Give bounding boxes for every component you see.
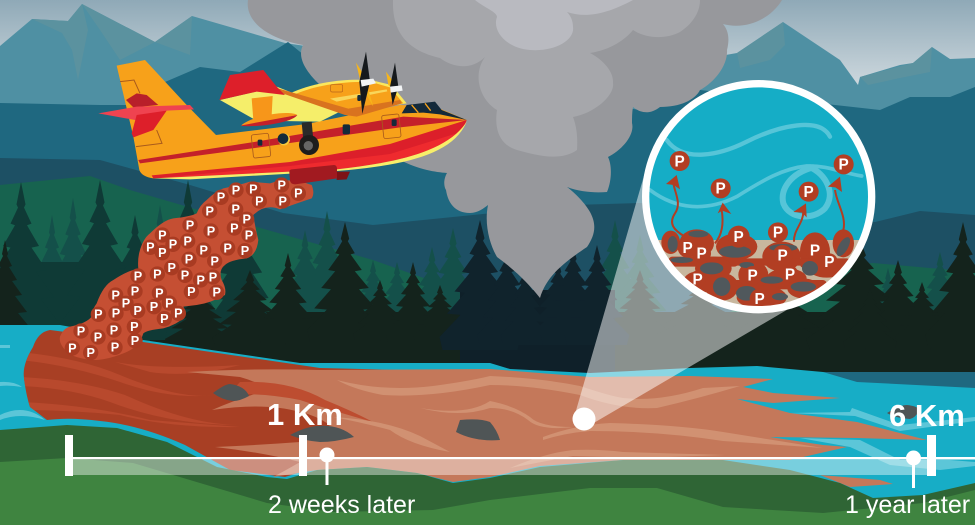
spotlight origin dot [572,408,596,430]
falling retardant with phosphorus particles: P [209,270,218,284]
falling retardant with phosphorus particles: P [199,243,208,257]
falling retardant with phosphorus particles: P [160,312,169,326]
water currents [650,125,862,217]
smoke column [248,0,782,298]
falling retardant with phosphorus particles: P [277,178,286,192]
falling retardant with phosphorus particles: P [153,267,162,281]
falling retardant with phosphorus particles: P [77,324,86,338]
falling retardant with phosphorus particles: P [155,286,164,300]
marker: 1 year [906,450,921,488]
sediment band [658,240,859,305]
falling retardant with phosphorus particles: P [249,182,258,196]
falling retardant with phosphorus particles: P [207,224,216,238]
falling retardant with phosphorus particles: P [196,273,205,287]
magnified inset circle: P [675,153,685,170]
marker: 2 weeks [320,448,334,485]
falling retardant with phosphorus particles: P [86,346,95,360]
fuselage stripe [138,117,467,163]
falling retardant with phosphorus particles: P [232,183,241,197]
falling retardant with phosphorus particles: P [169,238,178,252]
magnified inset circle: P [748,268,758,285]
magnified inset circle: P [824,254,834,271]
falling retardant with phosphorus particles: P [187,285,196,299]
forest: back trees [25,198,970,343]
magnified inset circle: P [778,247,788,264]
falling retardant with phosphorus particles: P [242,213,251,227]
lower hull red [152,120,467,178]
falling retardant with phosphorus particles: P [94,330,103,344]
label: 6 Km: 6 Km [889,398,965,433]
falling retardant with phosphorus particles: P [174,307,183,321]
magnified inset circle [640,83,880,313]
retardant tank [289,165,350,184]
float [242,113,297,126]
magnified inset circle: P [810,242,820,259]
tail details [120,80,162,147]
falling retardant with phosphorus particles: P [165,296,174,310]
far wing and engine housing [290,80,407,112]
falling retardant with phosphorus particles: P [158,246,167,260]
middle mountains [0,42,975,260]
wing tip [219,70,285,100]
magnified inset circle: P [734,229,744,246]
falling retardant with phosphorus particles: P [231,203,240,217]
ground under forest [0,262,975,375]
falling retardant with phosphorus particles: P [94,308,103,322]
fuselage windows and doors [251,95,401,158]
propeller 1 [356,52,376,114]
inset ring [646,84,872,310]
falling retardant with phosphorus particles: P [134,269,143,283]
magnified inset circle: P [839,157,849,174]
tail fin and fuselage [117,60,467,178]
falling retardant with phosphorus particles: P [183,234,192,248]
falling retardant with phosphorus particles: P [131,334,140,348]
magnified inset circle: P [693,271,703,288]
falling retardant with phosphorus particles: P [245,228,254,242]
magnified inset circle: P [804,184,814,201]
falling retardant with phosphorus particles: P [150,300,159,314]
pebble shadows [668,231,853,301]
pebbles [661,229,854,309]
falling retardant with phosphorus particles: P [112,307,121,321]
falling retardant with phosphorus particles: P [223,241,232,255]
forest: middle trees [0,180,275,342]
falling retardant with phosphorus particles: P [111,288,120,302]
tail stabilizers [98,93,194,137]
wing strut [252,96,290,125]
falling retardant with phosphorus particles: P [294,187,303,201]
plume streaks [20,352,240,427]
wing leading edge [277,88,402,117]
phosphorus particles [670,151,854,309]
plume: dark strip [225,382,373,422]
falling retardant with phosphorus particles: P [230,221,239,235]
sky [0,0,975,115]
magnified inset circle: P [755,291,765,308]
falling retardant with phosphorus particles: P [255,194,264,208]
main wing [220,87,340,122]
falling retardant with phosphorus particles: P [205,204,214,218]
plume: pale streaks [333,376,823,468]
landing gear [299,122,319,155]
falling retardant with phosphorus particles [60,177,313,360]
falling retardant with phosphorus particles: P [217,191,226,205]
falling retardant with phosphorus particles: P [185,253,194,267]
spotlight beam [575,155,843,424]
plume: light section [187,369,927,482]
label: 1 Km: 1 Km [267,397,343,432]
release arrows [672,183,844,243]
magnified inset circle: P [716,181,726,198]
magnified inset circle: P [785,266,795,283]
water [645,83,872,310]
falling retardant with phosphorus particles: P [122,297,131,311]
label: 2 weeks later: 2 weeks later [268,491,415,519]
falling retardant with phosphorus particles: P [111,341,120,355]
magnified inset circle: P [697,246,707,263]
hull yellow edge [153,122,467,179]
falling retardant with phosphorus particles: P [186,218,195,232]
water bomber plane [98,52,467,184]
magnified inset circle: P [683,240,693,257]
river highlights [0,345,975,470]
falling retardant with phosphorus particles: P [212,286,221,300]
magnified inset circle: P [773,225,783,242]
lower teal fringe and orange tail [820,475,893,487]
label: 1 year later: 1 year later [845,491,970,519]
propeller 2 [386,63,403,105]
green hill [0,176,975,345]
falling retardant with phosphorus particles: P [158,228,167,242]
falling retardant with phosphorus particles: P [130,320,139,334]
falling retardant with phosphorus particles: P [181,269,190,283]
falling retardant with phosphorus particles: P [133,304,142,318]
distance scale [65,435,975,476]
falling retardant with phosphorus particles: P [68,341,77,355]
falling retardant with phosphorus particles: P [110,323,119,337]
back mountains [0,4,975,180]
forest: navy trees [440,220,629,350]
forest: front trees [0,222,975,350]
river [0,325,975,510]
far ridge [0,158,975,320]
falling retardant with phosphorus particles: P [146,241,155,255]
falling retardant with phosphorus particles: P [210,254,219,268]
falling retardant with phosphorus particles: P [241,244,250,258]
falling retardant with phosphorus particles: P [167,261,176,275]
falling retardant with phosphorus particles: P [278,194,287,208]
light green bank [0,458,975,525]
falling retardant with phosphorus particles: P [131,285,140,299]
rocks [213,384,920,442]
dark green bank [0,425,975,525]
phosphorus plume: dark section [24,330,400,477]
cockpit [402,102,467,120]
hull bright red [153,133,457,178]
